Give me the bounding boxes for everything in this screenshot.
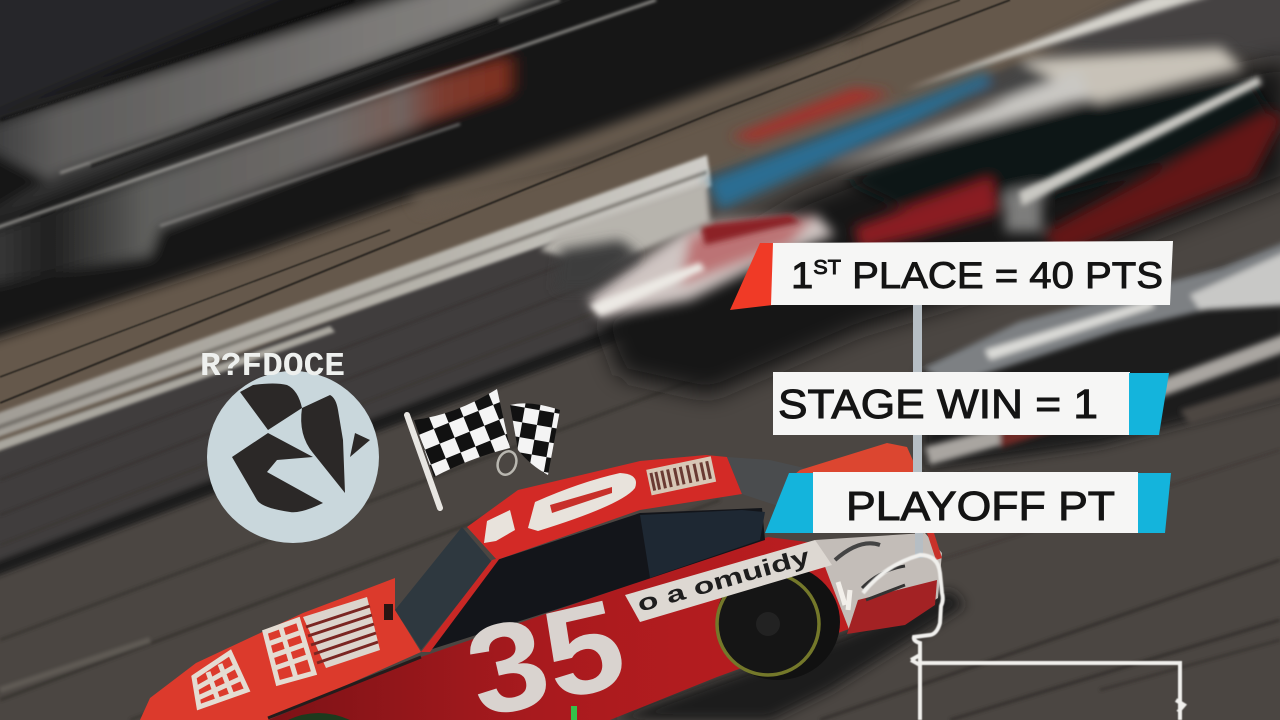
red tab bbox=[730, 243, 773, 310]
blurred car lower right bbox=[920, 240, 1280, 470]
logo dark shapes bbox=[232, 384, 370, 512]
rear deck bbox=[727, 457, 813, 510]
white sponsor strip bbox=[625, 540, 832, 622]
flag ring bbox=[494, 449, 520, 477]
panel: first place bbox=[730, 241, 1173, 310]
car nose shade bbox=[555, 240, 640, 290]
logo wordmark: R?FDOCE bbox=[200, 348, 345, 385]
windshield bbox=[395, 527, 492, 650]
brown apron streaks bbox=[0, 0, 1280, 403]
logo disc bbox=[207, 371, 379, 543]
rear logo scribble bbox=[835, 543, 905, 610]
hood decal stripes bbox=[303, 597, 380, 668]
rear window panel bbox=[640, 510, 765, 578]
blue tab bbox=[1129, 373, 1169, 435]
car shadow and dark sides bbox=[600, 60, 1280, 395]
rear bumper bbox=[847, 580, 937, 634]
white label bbox=[771, 241, 1173, 305]
sponsor text: o a omuidy bbox=[634, 543, 813, 617]
playoff text: PLAYOFF PT bbox=[846, 483, 1115, 529]
hood decal lettering bbox=[194, 620, 314, 707]
hood side crease bbox=[268, 657, 421, 718]
roof bbox=[467, 455, 742, 560]
grandstand wall blur bbox=[0, 0, 980, 350]
white track stripe bbox=[0, 155, 712, 454]
green marker bbox=[571, 706, 577, 720]
checkered flag icon bbox=[407, 389, 560, 508]
red race car bbox=[140, 443, 965, 720]
white label bbox=[773, 372, 1130, 435]
white label bbox=[813, 472, 1138, 533]
car shadow bbox=[610, 590, 965, 720]
first place text: 1 bbox=[791, 255, 812, 296]
panel: stage win bbox=[773, 372, 1169, 435]
rear red lip bbox=[927, 533, 942, 560]
panel: playoff point bbox=[765, 472, 1171, 533]
connector line bbox=[913, 305, 923, 558]
blurred car upper right bbox=[540, 45, 1280, 395]
front tyre bbox=[288, 713, 350, 720]
rear tyre bbox=[716, 564, 840, 680]
spoiler bbox=[790, 443, 918, 478]
rear quarter bbox=[815, 533, 942, 632]
stage win text: STAGE WIN = 1 bbox=[778, 381, 1098, 427]
first place text: ST bbox=[813, 257, 841, 279]
left blue tab bbox=[765, 473, 814, 533]
first place text: PLACE = 40 PTS bbox=[841, 255, 1163, 296]
red pillar bbox=[421, 558, 500, 652]
flag right bbox=[510, 403, 560, 475]
car hood bbox=[140, 578, 421, 720]
flag pole bbox=[407, 415, 440, 508]
logo badge bbox=[200, 348, 379, 543]
roof number decal bbox=[484, 473, 636, 543]
side windows bbox=[423, 508, 765, 652]
roof decal bbox=[646, 456, 716, 495]
hood vent bbox=[384, 604, 393, 620]
driver head outline and bracket bbox=[863, 555, 1184, 720]
flag left bbox=[414, 389, 510, 477]
lower side bbox=[268, 537, 860, 720]
right blue tab bbox=[1138, 473, 1171, 533]
